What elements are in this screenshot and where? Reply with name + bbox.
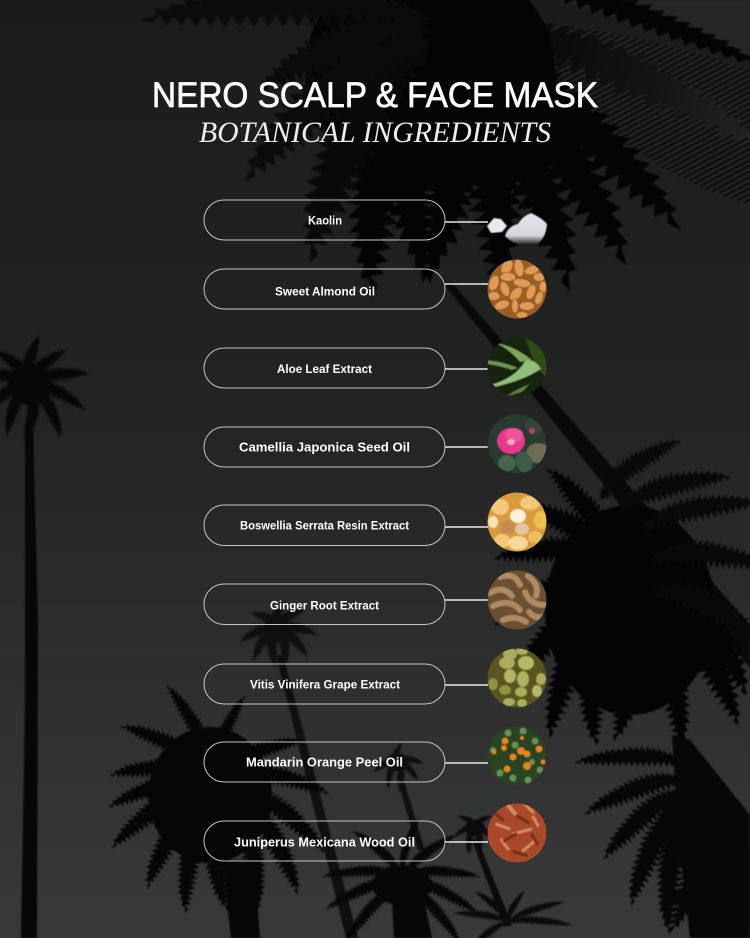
subtitle: BOTANICAL INGREDIENTS	[199, 116, 551, 149]
ingredient row: Boswellia Serrata Resin Extract	[204, 492, 548, 552]
palm tree: small distant centre	[238, 599, 358, 938]
ingredient row: Ginger Root Extract	[204, 570, 547, 630]
ingredient row: Ginger Root Extract: Ginger Root Extract	[270, 598, 379, 612]
icon: kaolin powder	[487, 213, 547, 245]
palm tree: small distant right of centre	[453, 810, 573, 938]
palm tree: small distant behind Juniperus pill	[371, 742, 425, 850]
ingredient row: Vitis Vinifera Grape Extract	[204, 647, 547, 708]
palm tree: right large	[485, 419, 750, 751]
ingredient row: Camellia Japonica Seed Oil: Camellia Japonica Seed Oil	[239, 440, 410, 454]
icon: ginger root	[487, 570, 547, 630]
ingredient row: Vitis Vinifera Grape Extract: Vitis Vinifera Grape Extract	[250, 678, 400, 692]
ingredient row: Aloe Leaf Extract: Aloe Leaf Extract	[277, 362, 372, 376]
ingredient row: Mandarin Orange Peel Oil	[204, 726, 547, 786]
ingredient row: Sweet Almond Oil	[204, 257, 547, 319]
palm tree: left tall thin	[0, 335, 90, 938]
ingredient row: Juniperus Mexicana Wood Oil: Juniperus Mexicana Wood Oil	[234, 836, 415, 850]
ingredient row: Aloe Leaf Extract	[204, 337, 547, 397]
palm tree: bottom centre	[321, 815, 484, 938]
palm tree: top centre crown with long diagonal trunk	[138, 0, 750, 668]
palm tree: lower left large	[99, 677, 339, 938]
icon: aloe leaf	[487, 337, 547, 397]
icon: camellia flower	[487, 414, 550, 475]
icon: boswellia resin	[487, 492, 548, 552]
title: NERO SCALP & FACE MASK	[152, 76, 598, 115]
ingredient row: Mandarin Orange Peel Oil: Mandarin Orange Peel Oil	[246, 756, 403, 770]
ingredient row: Kaolin	[204, 200, 547, 245]
icon: almonds	[487, 257, 547, 319]
icon: juniper wood chips	[487, 801, 547, 863]
ingredient row: Camellia Japonica Seed Oil	[204, 414, 550, 475]
ingredient row: Sweet Almond Oil: Sweet Almond Oil	[275, 284, 375, 298]
ingredient row: Kaolin: Kaolin	[308, 214, 342, 228]
icon: mandarin tree	[487, 726, 547, 786]
palm tree: lower right	[574, 735, 750, 938]
ingredient row: Boswellia Serrata Resin Extract: Boswellia Serrata Resin Extract	[240, 518, 409, 532]
icon: green grapes	[487, 647, 547, 708]
ingredient row: Juniperus Mexicana Wood Oil	[204, 801, 547, 863]
